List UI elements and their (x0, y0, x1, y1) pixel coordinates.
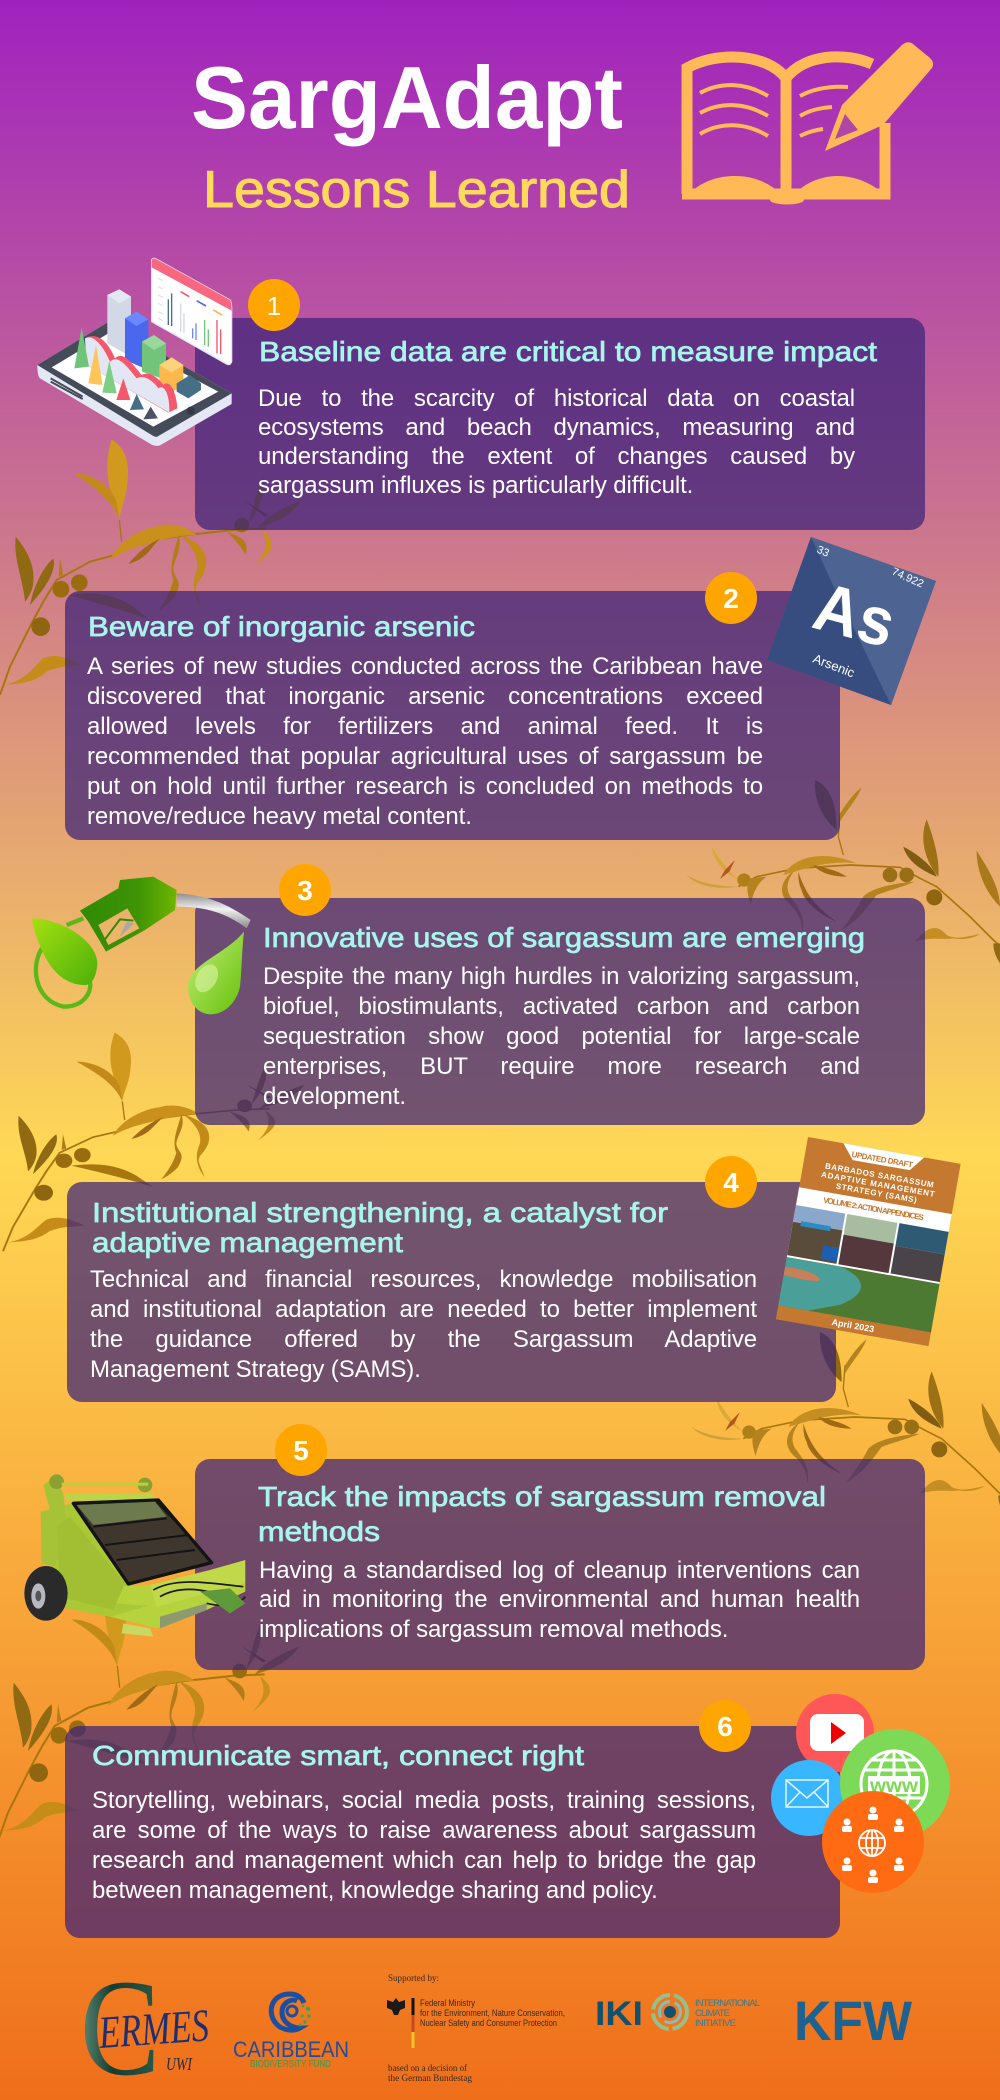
panel 3: innovative uses: biofuel, biostimulants, activated carbon and carbon (263, 992, 860, 1020)
icon: open book and pencil (682, 42, 933, 204)
panel 5: removal methods: methods (258, 1516, 380, 1547)
badge 5: 5 (293, 1435, 309, 1466)
logo: IKI International Climate Initiative (595, 1995, 760, 2033)
logo: German Federal Ministry (387, 1973, 565, 2083)
icon: report cover (776, 1137, 961, 1346)
panel 3: innovative uses: sequestration show good potential for large-scale (263, 1022, 860, 1050)
panel 5: removal methods: Having a standardised log of cleanup interventions can (259, 1556, 860, 1584)
icon: report cover: UPDATED DRAFT (851, 1150, 914, 1170)
panel 1: baseline data: understanding the extent of changes caused by (258, 443, 855, 470)
main title: SargAdapt (191, 48, 623, 147)
logo: German Federal Ministry: Federal Ministry (420, 1998, 475, 2008)
logo: IKI International Climate Initiative: CLIMATE (695, 2008, 730, 2019)
panel 1: baseline data: sargassum influxes is particularly difficult. (258, 472, 693, 499)
icon: report cover: April 2023 (831, 1317, 875, 1334)
panel 6: communicate smart: research and management which can help to bridge the gap (92, 1846, 756, 1874)
icon: arsenic element tile: Arsenic (811, 651, 857, 681)
icon: communication bubbles: www (869, 1776, 918, 1797)
badge 4: 4 (723, 1167, 739, 1198)
panel 3: innovative uses: Despite the many high hurdles in valorizing sargassum, (263, 962, 860, 990)
icon: report cover: STRATEGY (SAMS) (835, 1182, 918, 1205)
icon: tablet with 3D charts (37, 258, 232, 446)
icon: arsenic element tile: 33 (815, 544, 831, 560)
panel 3: innovative uses (195, 898, 925, 1125)
badge 5 (275, 1424, 327, 1476)
badge 6 (699, 1700, 751, 1752)
panel 4: institutional strengthening (67, 1182, 836, 1402)
panel 5: removal methods: Track the impacts of sargassum removal (258, 1481, 826, 1512)
panel 1: baseline data (195, 318, 925, 530)
icon: report cover: VOLUME 2: ACTION APPENDICES (822, 1196, 925, 1222)
logo: KFW: KFW (794, 1989, 912, 2052)
logo: German Federal Ministry: the German Bundestag (388, 2073, 473, 2083)
logo: Caribbean Biodiversity Fund: CARIBBEAN (233, 2037, 349, 2062)
logo: Caribbean Biodiversity Fund: BIODIVERSITY FUND (250, 2059, 331, 2070)
panel 4: institutional strengthening: Management Strategy (SAMS). (90, 1356, 421, 1382)
panel 5: removal methods (195, 1459, 925, 1670)
panel 6: communicate smart: Communicate smart, connect right (92, 1740, 584, 1771)
panel 6: communicate smart: between management, knowledge sharing and policy. (92, 1876, 658, 1904)
panel 2: inorganic arsenic: recommended that popular agricultural uses of sargassum be (87, 742, 763, 770)
badge 6: 6 (717, 1711, 733, 1742)
panel 1: baseline data: Baseline data are critical to measure impact (259, 336, 877, 367)
icon: arsenic element tile: 74.922 (890, 566, 925, 590)
panel 5: removal methods: aid in monitoring the environmental and human health (259, 1586, 860, 1613)
logo: IKI International Climate Initiative: IKI (595, 1995, 643, 2033)
icon: beach cleaning machine (24, 1474, 245, 1637)
badge 3 (279, 864, 331, 916)
panel 2: inorganic arsenic: allowed levels for fertilizers and animal feed. It is (87, 712, 763, 740)
badge 2: 2 (723, 583, 739, 614)
badge 2 (705, 572, 757, 624)
panel 2: inorganic arsenic: put on hold until further research is concluded on methods to (87, 772, 763, 800)
logo: German Federal Ministry: Nuclear Safety and Consumer Protection (420, 2018, 557, 2028)
panel 2: inorganic arsenic (65, 591, 840, 840)
icon: fuel nozzle with leaf and drop (32, 877, 251, 1014)
panel 4: institutional strengthening: the guidance offered by the Sargassum Adaptive (90, 1326, 757, 1352)
panel 4: institutional strengthening: Institutional strengthening, a catalyst for (92, 1197, 668, 1228)
logo: German Federal Ministry: based on a decision of (388, 2063, 467, 2073)
badge 1 (248, 279, 300, 331)
panel 4: institutional strengthening: adaptive management (92, 1227, 403, 1258)
badge 3: 3 (297, 875, 313, 906)
panel 1: baseline data: Due to the scarcity of historical data on coastal (258, 385, 855, 412)
panel 2: inorganic arsenic: discovered that inorganic arsenic concentrations exceed (87, 682, 763, 710)
panel 6: communicate smart: are some of the ways to raise awareness about sargassum (92, 1816, 756, 1844)
panel 1: baseline data: ecosystems and beach dynamics, measuring and (258, 414, 855, 441)
logo: Caribbean Biodiversity Fund (233, 1994, 349, 2070)
icon: report cover: ADAPTIVE MANAGEMENT (820, 1170, 935, 1199)
icon: report cover: BARBADOS SARGASSUM (824, 1162, 935, 1190)
panel 4: institutional strengthening: and institutional adaptation are needed to better implement (90, 1296, 757, 1322)
logo: CERMES UWI: ERMES (96, 1999, 210, 2058)
logo: CERMES UWI: UWI (166, 2054, 193, 2074)
icon: communication bubbles (771, 1694, 950, 1893)
panel 3: innovative uses: enterprises, BUT require more research and (263, 1052, 860, 1080)
logo: German Federal Ministry: for the Environment, Nature Conservation, (420, 2008, 565, 2018)
panel 2: inorganic arsenic: Beware of inorganic arsenic (88, 611, 475, 642)
icon: arsenic element tile (767, 537, 936, 705)
logo: IKI International Climate Initiative: INTERNATIONAL (695, 1998, 760, 2009)
logo: IKI International Climate Initiative: INITIATIVE (695, 2018, 736, 2029)
panel 6: communicate smart: Storytelling, webinars, social media posts, training sessions, (92, 1786, 756, 1814)
subtitle: Lessons Learned (203, 161, 630, 219)
panel 5: removal methods: implications of sargassum removal methods. (259, 1616, 728, 1643)
badge 1: 1 (267, 291, 281, 321)
logo: CERMES UWI: C (80, 1951, 160, 2100)
panel 6: communicate smart (65, 1726, 840, 1938)
panel 2: inorganic arsenic: A series of new studies conducted across the Caribbean have (87, 652, 763, 680)
panel 3: innovative uses: Innovative uses of sargassum are emerging (263, 922, 865, 953)
panel 3: innovative uses: development. (263, 1082, 406, 1110)
icon: arsenic element tile: As (806, 568, 903, 662)
logo: German Federal Ministry: Supported by: (388, 1973, 439, 1983)
badge 4 (705, 1156, 757, 1208)
panel 2: inorganic arsenic: remove/reduce heavy metal content. (87, 802, 472, 830)
panel 4: institutional strengthening: Technical and financial resources, knowledge mobilisation (90, 1266, 757, 1292)
